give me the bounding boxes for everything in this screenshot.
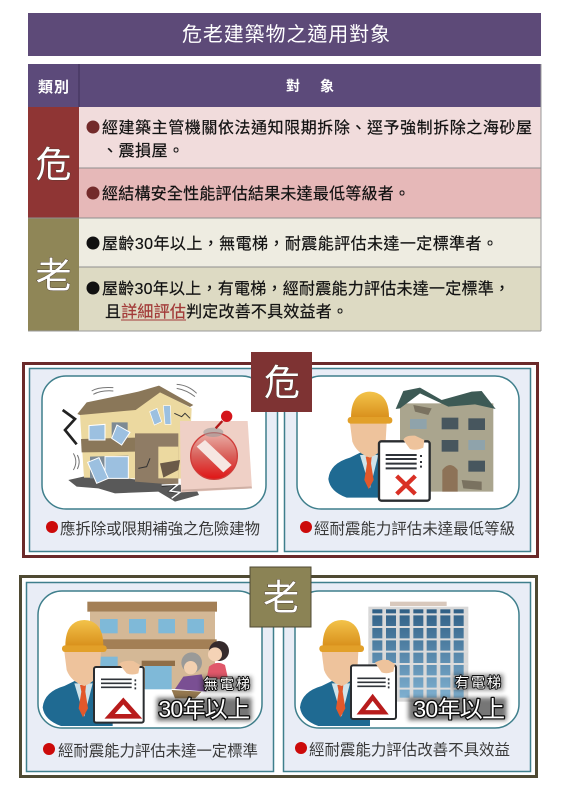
- row: old 1: [79, 218, 541, 267]
- illustration: damaged house: [63, 384, 252, 502]
- row: old label: 老: [36, 255, 72, 296]
- table header: 對 象: [286, 78, 334, 94]
- row: danger label: 危: [36, 144, 72, 185]
- table: applicable targets: [28, 64, 541, 331]
- card: no elevator: [26, 582, 274, 772]
- caption: 經耐震能力評估改善不具效益: [309, 741, 510, 759]
- illustration: inspector and old building: [328, 388, 496, 501]
- card: demolition: [30, 368, 278, 552]
- label: no elevator: 無電梯: [204, 676, 250, 692]
- panel: danger: [24, 352, 538, 556]
- row: danger 2: 經結構安全性能評估結果未達最低等級者。: [102, 184, 410, 203]
- caption: 經耐震能力評估未達最低等級: [314, 519, 515, 538]
- row: old 2: 且詳細評估判定改善不具效益者。: [105, 303, 348, 321]
- badge: old: 老: [263, 577, 299, 618]
- row: danger 2: [79, 168, 541, 218]
- caption: 應拆除或限期補強之危險建物: [60, 519, 260, 538]
- row: danger 1: 經建築主管機關依法通知限期拆除、逕予強制拆除之海砂屋: [102, 118, 532, 137]
- label: has elevator: 有電梯: [455, 674, 501, 690]
- row: danger 1: 、震損屋。: [102, 142, 184, 160]
- illustration: low-rise building, residents: [43, 602, 252, 726]
- illustration: tower building: [300, 602, 507, 726]
- badge: old: [250, 567, 311, 627]
- title bar: [28, 13, 541, 56]
- table header: [28, 64, 541, 107]
- row: old 2: 屋齡30年以上，有電梯，經耐震能力評估未達一定標準，: [102, 280, 510, 298]
- card: below minimum grade: [284, 368, 530, 552]
- row: old 1: 屋齡30年以上，無電梯，耐震能評估未達一定標準者。: [102, 235, 498, 253]
- row: danger 1: [79, 107, 541, 168]
- panel: old: [20, 567, 536, 776]
- badge: danger: 危: [264, 362, 300, 403]
- row: old label: [28, 218, 79, 331]
- label: over 30 years: 30年以上: [413, 696, 505, 722]
- card: retrofit not cost-effective: [284, 582, 530, 772]
- table header: 類別: [38, 79, 69, 96]
- label: over 30 years: 30年以上: [158, 696, 250, 722]
- row: old 2: [79, 267, 541, 331]
- badge: danger: [251, 352, 312, 412]
- row: danger label: [28, 107, 79, 218]
- title: 危老建築物之適用對象: [182, 23, 390, 46]
- caption: 經耐震能力評估未達一定標準: [58, 742, 258, 760]
